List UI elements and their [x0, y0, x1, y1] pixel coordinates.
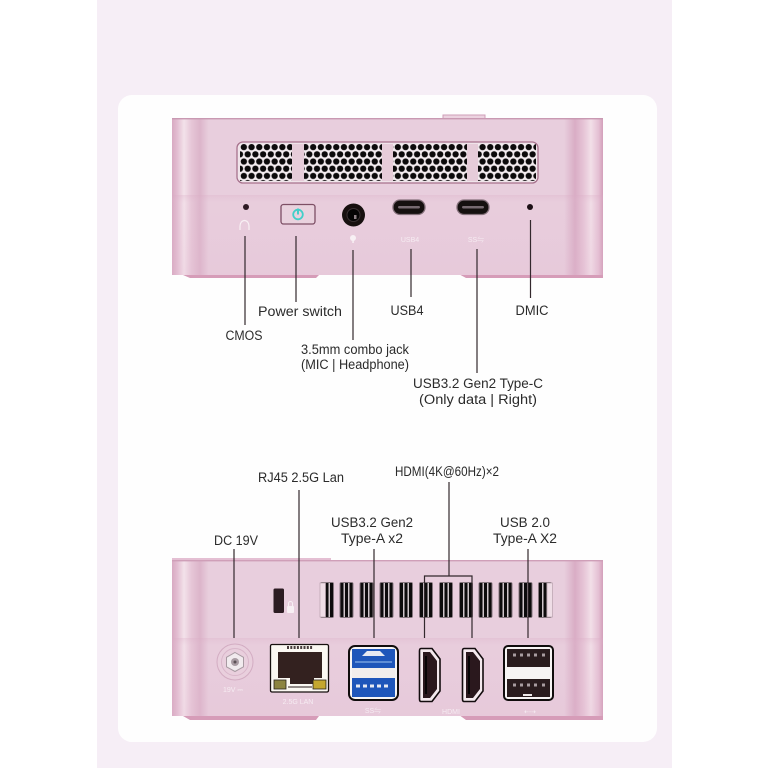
label: DMIC: DMIC — [516, 303, 549, 318]
USB3 port: SS⇋ — [365, 707, 381, 715]
DC jack — [217, 644, 253, 694]
chassis — [172, 560, 603, 716]
label: USB3.2 Gen2 Type-C: USB3.2 Gen2 Type-C — [413, 376, 543, 391]
leader lines: rear — [234, 482, 528, 638]
HDMI ports: HDMI — [442, 709, 460, 716]
USB2 port: ⇠⇢ — [524, 709, 536, 716]
USB-C port — [457, 200, 489, 244]
white card — [118, 95, 657, 742]
leader lines: front — [245, 220, 530, 373]
USB3 port — [349, 646, 398, 715]
label: USB3.2 Gen2 Type-A: Type-A x2 — [341, 531, 403, 546]
device: front view — [172, 115, 603, 278]
label: combo jack: 3.5mm combo jack — [301, 342, 409, 357]
label: USB3.2 Gen2 Type-A — [331, 515, 413, 546]
label: Power switch: Power switch — [258, 304, 342, 319]
background panel — [97, 0, 672, 768]
LAN port — [270, 644, 328, 706]
chassis — [172, 118, 603, 275]
bottom feet — [176, 272, 603, 278]
LAN port: 2.5G LAN — [283, 699, 313, 706]
label: combo jack: (MIC | Headphone) — [301, 357, 409, 372]
bottom feet — [176, 712, 603, 720]
label: USB3.2 Gen2 Type-C: (Only data | Right) — [419, 392, 537, 407]
top tab — [172, 558, 331, 562]
label: USB3.2 Gen2 Type-A: USB3.2 Gen2 — [331, 515, 413, 530]
USB4 port: USB4 — [401, 237, 419, 244]
device: rear view — [172, 558, 603, 720]
vent grille — [237, 142, 538, 183]
label: USB4: USB4 — [390, 303, 424, 318]
DC jack: 19V ⎓ — [223, 687, 243, 694]
HDMI ports — [420, 648, 483, 716]
vent slots — [320, 582, 552, 618]
label: USB 2.0: Type-A X2 — [493, 531, 557, 546]
DMIC pinhole — [527, 204, 533, 210]
power button — [281, 204, 315, 224]
USB-C port: SS⇋ — [468, 236, 484, 244]
USB2 port — [504, 646, 553, 716]
label: USB 2.0 — [493, 515, 557, 546]
USB4 port — [393, 200, 425, 244]
label: CMOS: CMOS — [226, 328, 262, 343]
audio jack — [342, 204, 365, 243]
top tab — [443, 115, 485, 123]
label: combo jack — [301, 342, 409, 372]
CMOS pinhole — [240, 204, 249, 230]
label: USB 2.0: USB 2.0 — [500, 515, 550, 530]
lock slot — [274, 588, 294, 613]
label: DC 19V: DC 19V — [214, 533, 258, 548]
label: HDMI: HDMI(4K@60Hz)×2 — [395, 464, 499, 479]
label: USB3.2 Gen2 Type-C — [413, 376, 543, 407]
label: RJ45: RJ45 2.5G Lan — [258, 470, 344, 485]
